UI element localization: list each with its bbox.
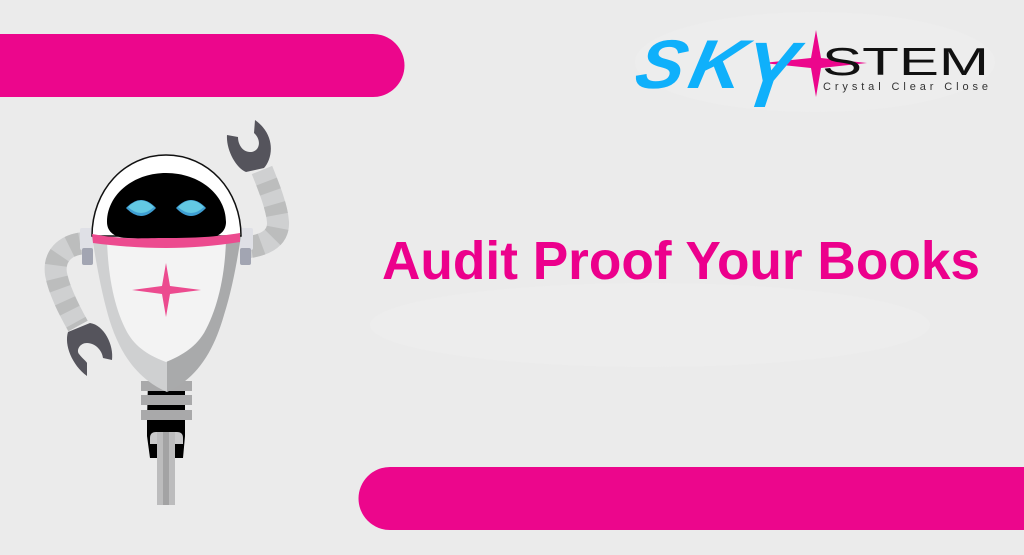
- logo wordmark STEM: STEM: [822, 41, 989, 84]
- top pink banner: [0, 34, 405, 97]
- lowered arm: [56, 243, 88, 326]
- title: Audit Proof Your Books: [382, 231, 980, 291]
- shoulder joints: [80, 228, 253, 265]
- chest star: [132, 263, 201, 317]
- bottom pink banner: [358, 467, 1024, 530]
- logo star: [763, 30, 867, 97]
- eyes: [126, 200, 206, 216]
- visor: [107, 173, 226, 240]
- logo wordmark SKY: S: [628, 26, 696, 103]
- logo wordmark SKY: [628, 23, 809, 128]
- head dome: [92, 155, 241, 236]
- pink collar band: [92, 233, 240, 248]
- logo tagline: Crystal Clear Close: [823, 81, 988, 93]
- logo: Skystem: [628, 23, 989, 128]
- raised arm: [243, 170, 278, 248]
- logo wordmark SKY: Y: [734, 23, 809, 128]
- raised claw: [227, 120, 271, 172]
- lowered claw: [67, 323, 112, 376]
- body shell: [92, 236, 241, 392]
- robot mascot: [56, 120, 278, 505]
- neck and pole: [141, 381, 192, 505]
- logo wordmark SKY: K: [683, 26, 758, 103]
